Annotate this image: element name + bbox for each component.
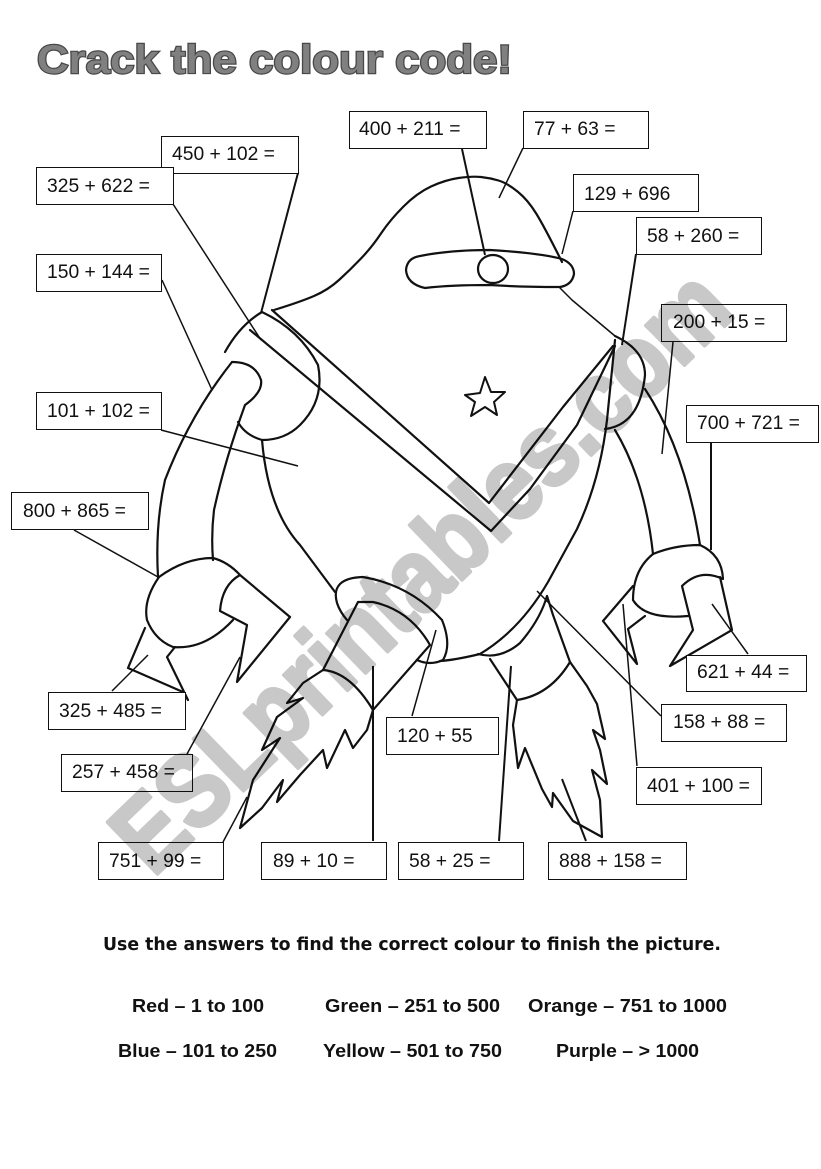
right shoulder bbox=[605, 336, 645, 429]
label: 800 + 865 bbox=[12, 492, 148, 530]
label: 450 + 102: 450 + 102 = bbox=[172, 144, 275, 165]
label: 58 + 25 bbox=[398, 842, 524, 880]
label: 888 + 158 bbox=[548, 842, 686, 880]
label: 77 + 63 bbox=[524, 112, 648, 148]
left leg cuff bbox=[336, 577, 447, 663]
robot visor bbox=[406, 250, 574, 288]
label: 58 + 260: 58 + 260 = bbox=[647, 226, 739, 247]
label: 58 + 260 bbox=[636, 218, 762, 254]
pointer lines bbox=[74, 148, 748, 842]
colour key: Orange – 751 to 1000 bbox=[528, 995, 727, 1016]
left arm bbox=[157, 362, 232, 577]
label: 257 + 458: 257 + 458 = bbox=[72, 762, 175, 783]
label: 700 + 721: 700 + 721 = bbox=[697, 413, 800, 434]
label: 257 + 458 bbox=[62, 754, 192, 792]
right arm bbox=[645, 389, 700, 545]
right hand bbox=[653, 545, 732, 666]
label: 700 + 721 bbox=[686, 406, 818, 442]
title: Crack the colour code! bbox=[37, 38, 512, 82]
star bbox=[465, 377, 505, 416]
robot drawing bbox=[128, 177, 732, 837]
colour key: Green – 251 to 500 bbox=[325, 995, 500, 1016]
body sides bbox=[440, 340, 615, 661]
label: 200 + 15: 200 + 15 = bbox=[673, 312, 765, 333]
bottom between legs bbox=[490, 596, 570, 700]
label: 158 + 88: 158 + 88 = bbox=[673, 712, 765, 733]
label: 400 + 211: 400 + 211 = bbox=[359, 119, 460, 140]
chest sash bbox=[272, 310, 613, 503]
label: 621 + 44 bbox=[686, 656, 806, 692]
label: 325 + 622: 325 + 622 = bbox=[47, 176, 150, 197]
label: 751 + 99: 751 + 99 = bbox=[109, 851, 201, 872]
colour key: Purple – > 1000 bbox=[556, 1040, 699, 1061]
label: 751 + 99 bbox=[98, 842, 224, 880]
label: 101 + 102 bbox=[36, 392, 162, 430]
instruction text: Use the answers to find the correct colour to finish the picture. bbox=[103, 935, 721, 955]
label: 101 + 102: 101 + 102 = bbox=[47, 401, 150, 422]
neck line bbox=[560, 288, 615, 336]
label: 89 + 10 bbox=[262, 842, 386, 880]
label: 400 + 211 bbox=[350, 112, 486, 148]
colour key: Yellow – 501 to 750 bbox=[323, 1040, 502, 1061]
robot visor gem bbox=[478, 255, 508, 283]
label: 401 + 100 bbox=[636, 768, 762, 804]
left leg flame bbox=[323, 602, 430, 710]
label: 120 + 55: 120 + 55 bbox=[397, 726, 473, 747]
label: 325 + 485: 325 + 485 = bbox=[59, 701, 162, 722]
right leg flame bbox=[513, 662, 607, 837]
label: 888 + 158: 888 + 158 = bbox=[559, 851, 662, 872]
label: 800 + 865: 800 + 865 = bbox=[23, 501, 126, 522]
label: 89 + 10: 89 + 10 = bbox=[273, 851, 354, 872]
label: 129 + 696: 129 + 696 bbox=[584, 184, 670, 205]
left hand bbox=[159, 558, 290, 682]
label: 58 + 25: 58 + 25 = bbox=[409, 851, 490, 872]
label: 621 + 44: 621 + 44 = bbox=[697, 662, 789, 683]
colour key: Red – 1 to 100 bbox=[132, 995, 264, 1016]
label: 129 + 696 bbox=[574, 174, 698, 212]
label: 401 + 100: 401 + 100 = bbox=[647, 776, 750, 797]
label: 77 + 63: 77 + 63 = bbox=[534, 119, 615, 140]
label: 120 + 55 bbox=[386, 718, 498, 754]
robot head bbox=[274, 177, 562, 310]
label: 200 + 15 bbox=[662, 304, 786, 342]
label: 325 + 622 bbox=[36, 168, 174, 204]
colour key: Blue – 101 to 250 bbox=[118, 1040, 277, 1061]
left shoulder bbox=[225, 312, 320, 440]
colour key bbox=[118, 995, 727, 1061]
label: 158 + 88 bbox=[662, 704, 786, 742]
label: 450 + 102 bbox=[162, 136, 298, 174]
label: 150 + 144: 150 + 144 = bbox=[47, 262, 150, 283]
label: 325 + 485 bbox=[48, 692, 186, 730]
label: 150 + 144 bbox=[36, 254, 162, 292]
